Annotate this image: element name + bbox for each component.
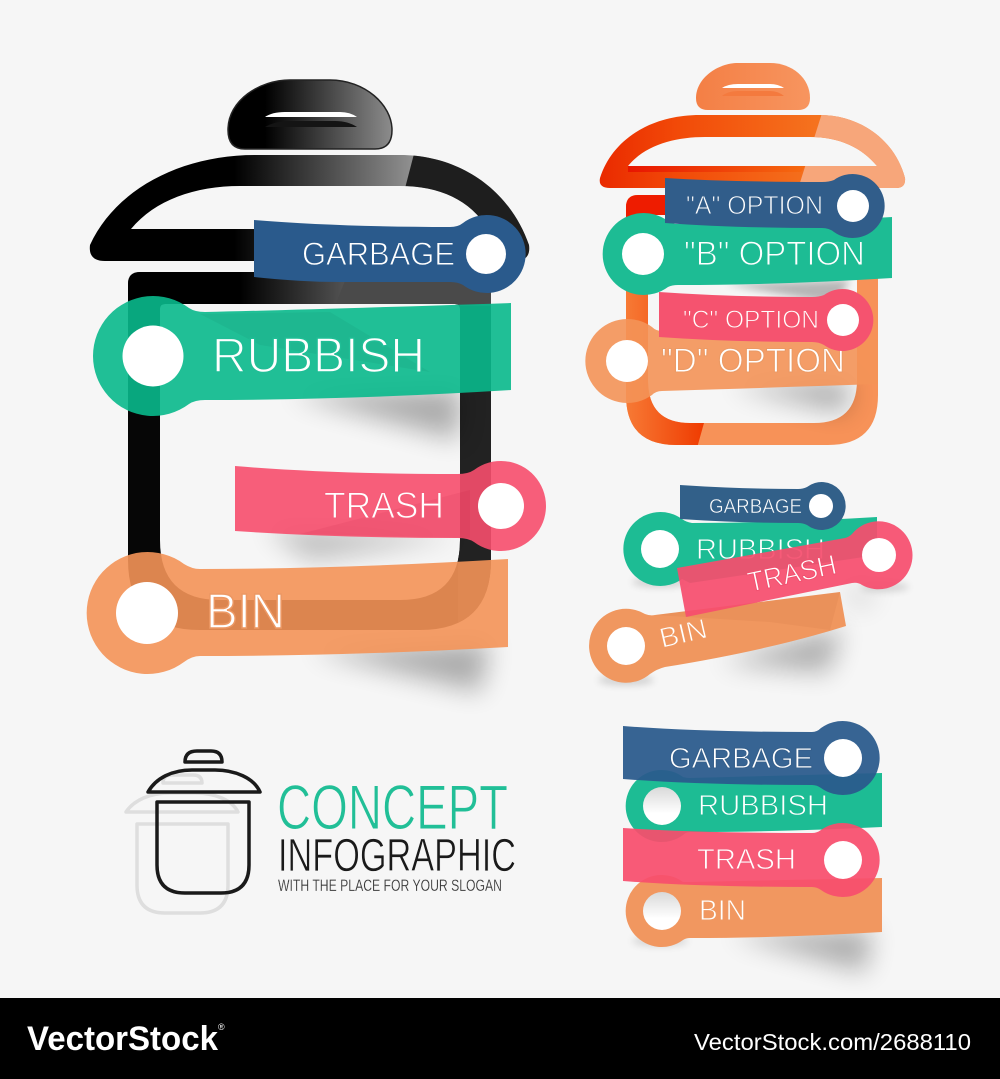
footer logo text: VectorStock	[27, 1020, 218, 1058]
label: RUBBISH stacked	[626, 770, 882, 842]
pot lid	[90, 155, 530, 261]
label: BIN tilted: BIN	[656, 613, 710, 654]
footer url text: VectorStock.com/2688110	[694, 1029, 971, 1055]
panel: large pot with labels	[85, 80, 546, 692]
orange body	[622, 192, 882, 448]
label: GARBAGE stacked: GARBAGE	[669, 743, 813, 775]
option A: "A" OPTION	[686, 190, 823, 220]
panel: orange pot with options	[585, 63, 910, 448]
option D: "D" OPTION	[661, 342, 845, 380]
label: BIN: BIN	[206, 585, 285, 639]
label: TRASH tilted: TRASH	[745, 549, 839, 598]
label: GARBAGE small: GARBAGE	[709, 496, 802, 518]
label: RUBBISH stacked: RUBBISH	[698, 790, 828, 822]
option C	[659, 289, 873, 351]
icon: ghost pot outline	[126, 775, 238, 913]
orange pot icon	[596, 63, 910, 448]
label: RUBBISH	[93, 296, 511, 416]
orange lid	[600, 115, 906, 188]
title: INFOGRAPHIC: INFOGRAPHIC	[278, 829, 516, 881]
shadows	[725, 280, 850, 412]
label: RUBBISH tilted: RUBBISH	[696, 534, 825, 566]
large pot icon	[85, 80, 540, 636]
option C: "C" OPTION	[683, 306, 819, 334]
option D	[585, 319, 878, 403]
label: BIN stacked	[626, 875, 882, 947]
label: BIN stacked: BIN	[699, 895, 746, 927]
label: GARBAGE stacked	[623, 721, 880, 795]
panel: stacked labels	[623, 721, 882, 972]
shadows	[598, 577, 909, 685]
title: CONCEPT: CONCEPT	[277, 773, 508, 843]
shadows	[265, 388, 490, 692]
option B: "B" OPTION	[684, 235, 865, 273]
label: RUBBISH tilted	[623, 512, 877, 586]
label: RUBBISH: RUBBISH	[212, 329, 425, 383]
shadows	[632, 930, 872, 972]
label: GARBAGE	[254, 215, 526, 293]
option A	[665, 174, 885, 238]
label: TRASH	[235, 461, 546, 551]
panel: logo and title	[126, 751, 516, 913]
label: TRASH stacked	[623, 823, 880, 897]
panel: tilted labels	[589, 482, 913, 685]
label: GARBAGE small	[680, 482, 846, 530]
label: BIN	[87, 552, 508, 674]
label: TRASH tilted	[677, 521, 913, 617]
label: TRASH: TRASH	[324, 485, 444, 526]
slogan: WITH THE PLACE FOR YOUR SLOGAN	[278, 876, 502, 895]
label: BIN tilted	[589, 592, 846, 683]
icon: outline pot	[148, 751, 260, 893]
pot knob	[228, 80, 392, 149]
orange knob	[696, 63, 810, 110]
pot body	[125, 268, 495, 636]
footer registered mark: ®	[218, 1022, 225, 1032]
label: TRASH stacked: TRASH	[697, 844, 796, 876]
option B	[603, 213, 892, 295]
footer bar	[0, 998, 1000, 1079]
label: GARBAGE: GARBAGE	[302, 236, 455, 272]
